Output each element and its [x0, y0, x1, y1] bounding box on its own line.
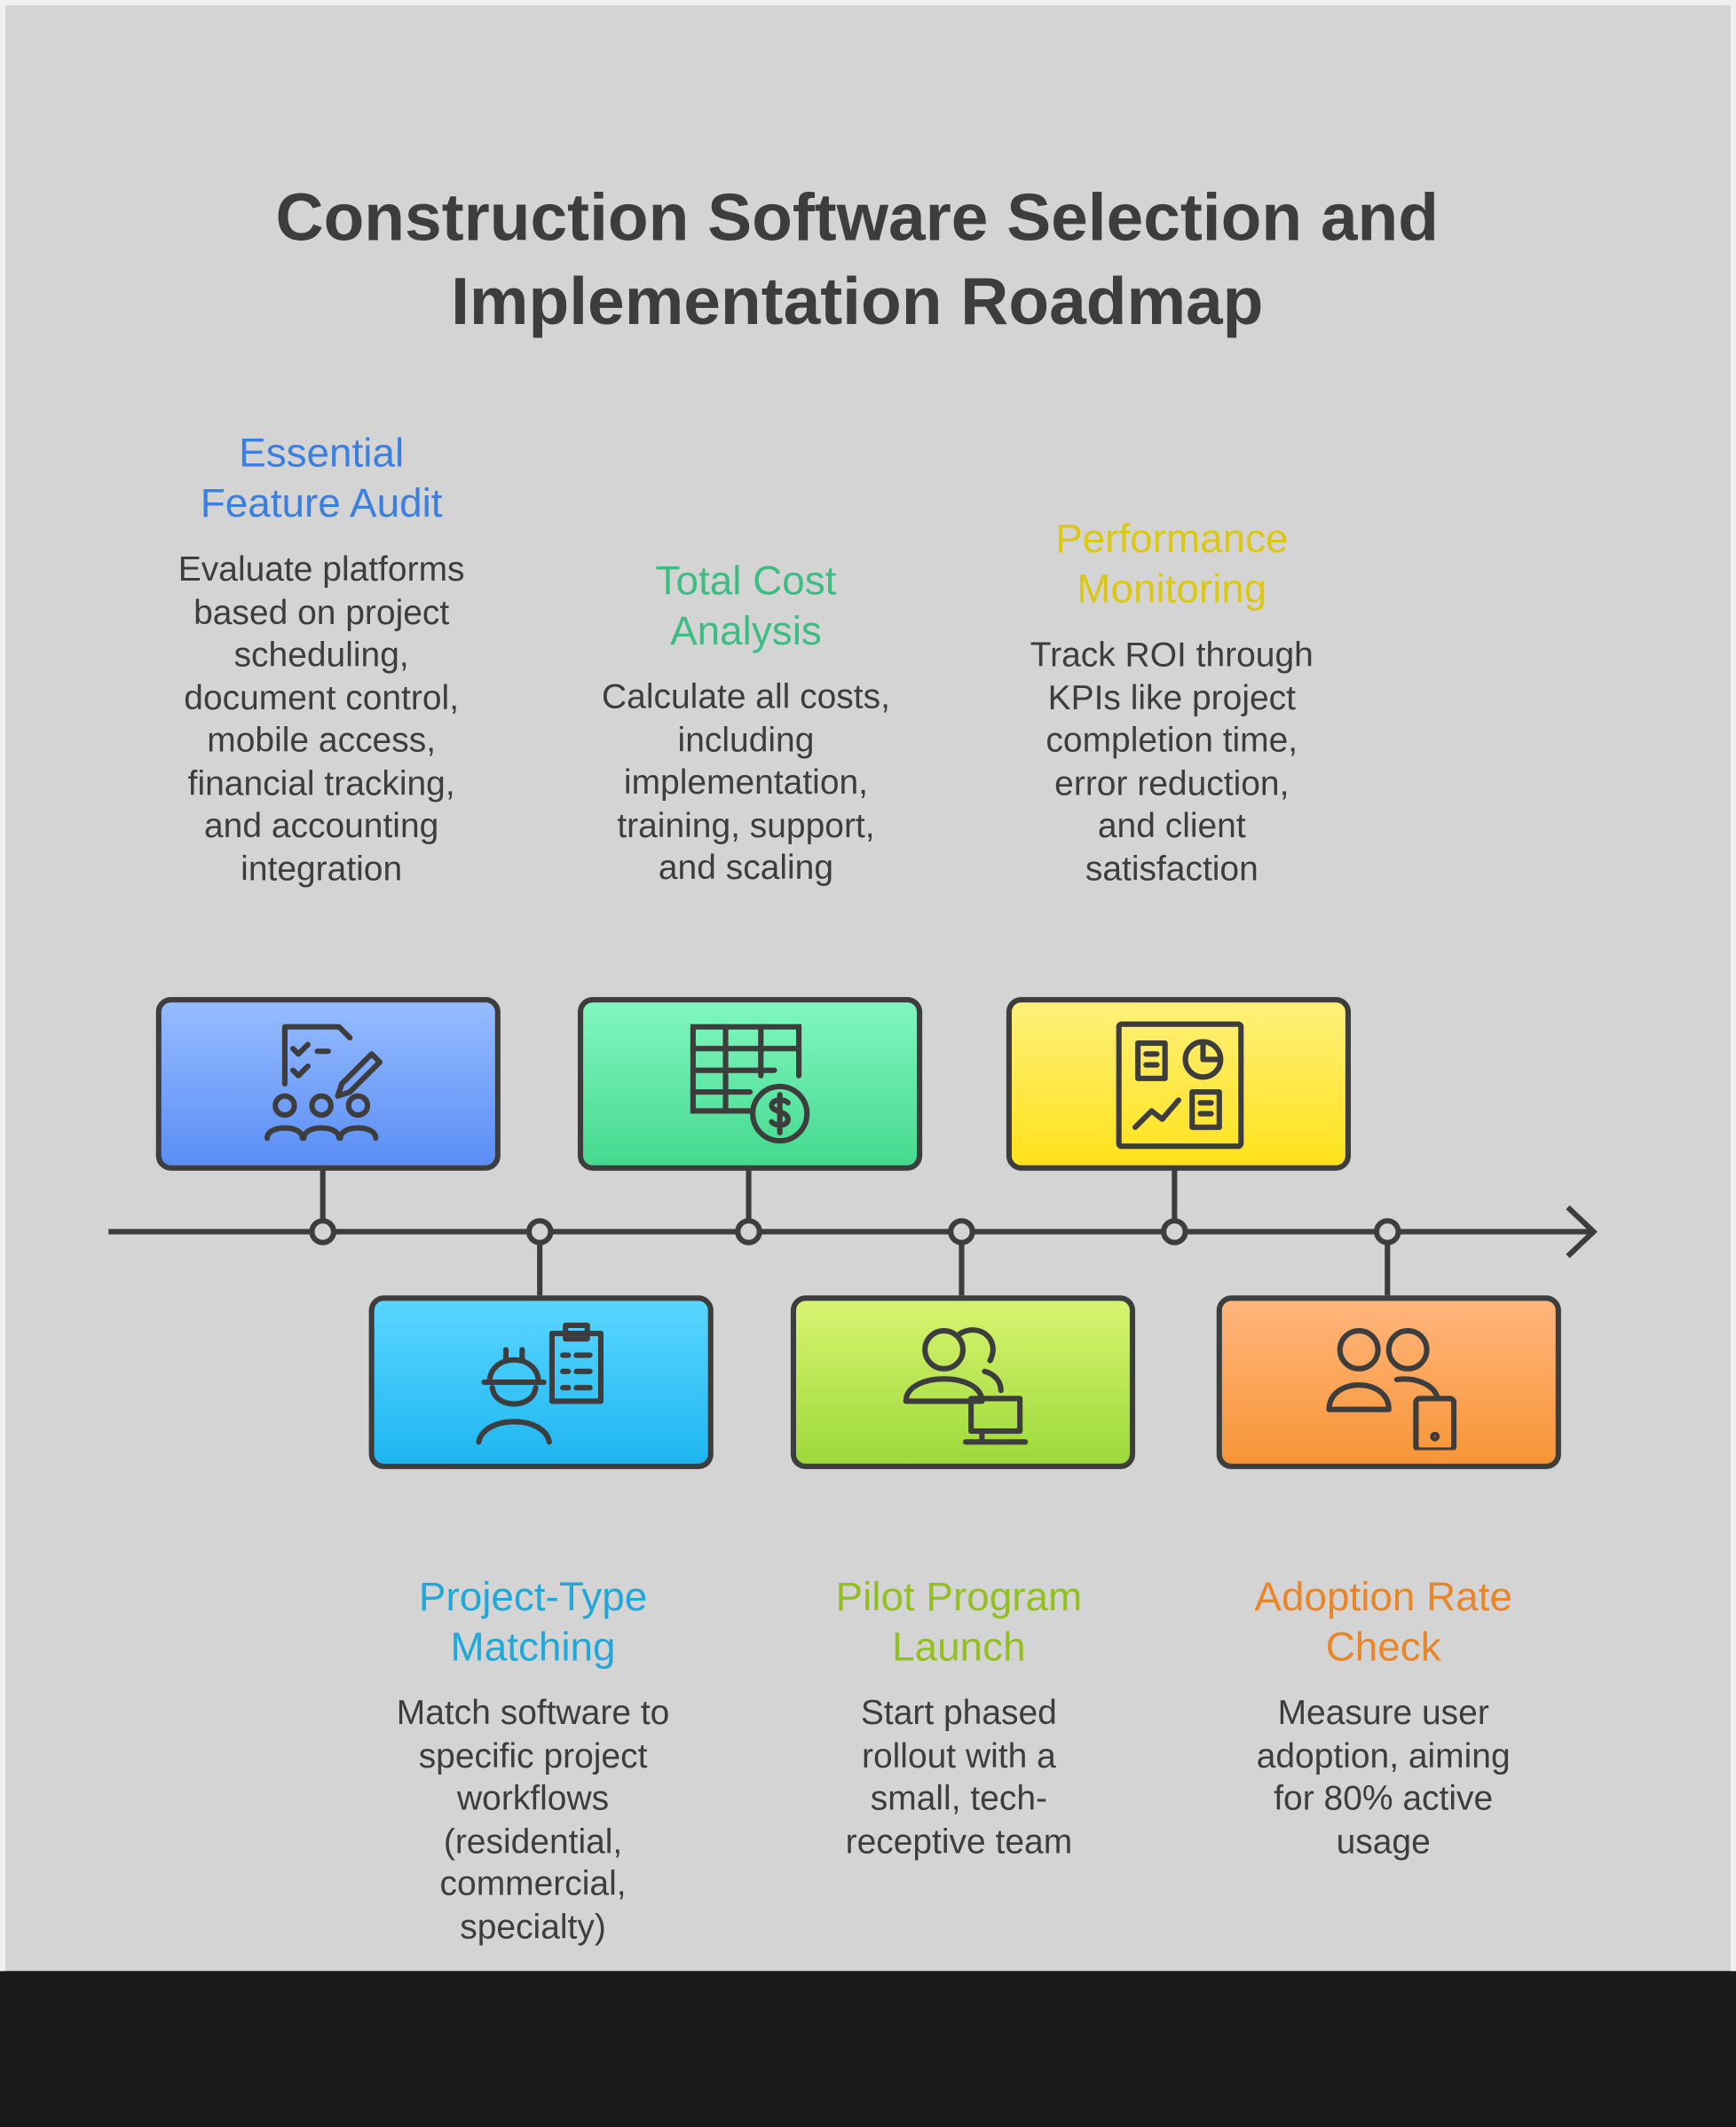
text: Project-Type Matching [397, 1575, 669, 1946]
title: Implementation Roadmap [451, 265, 1263, 339]
text: Project-Type Matching: specialty) [460, 1908, 606, 1946]
text: Adoption Rate Check: Measure user [1278, 1695, 1489, 1732]
text: Total Cost Analysis: Total Cost [656, 559, 836, 604]
text: Total Cost Analysis: and scaling [659, 850, 833, 887]
icon: worker clipboard [476, 1323, 604, 1445]
box: adoption rate [1217, 1295, 1561, 1469]
text: Essential Feature Audit: Essential [239, 431, 404, 476]
text: Project-Type Matching: specific project [419, 1737, 647, 1775]
text: Performance Monitoring: Track ROI through [1030, 637, 1314, 674]
text: Total Cost Analysis: implementation, [624, 763, 868, 802]
text: Project-Type Matching: Matching [451, 1625, 616, 1670]
text: Performance Monitoring: satisfaction [1085, 850, 1259, 888]
text: Pilot Program Launch: Launch [892, 1625, 1026, 1670]
text: Adoption Rate Check: adoption, aiming [1257, 1737, 1511, 1775]
title: Construction Software Selection and [275, 182, 1439, 255]
text: Project-Type Matching: commercial, [440, 1865, 627, 1903]
text: Performance Monitoring: and client [1098, 807, 1246, 845]
text: Pilot Program Launch [836, 1575, 1082, 1861]
text: Performance Monitoring: KPIs like project [1048, 679, 1296, 717]
text: Total Cost Analysis: including [678, 721, 814, 759]
text: Project-Type Matching: Match software to [397, 1695, 669, 1732]
text: Essential Feature Audit [178, 431, 465, 888]
text: Performance Monitoring: completion time, [1046, 722, 1298, 760]
text: Pilot Program Launch: rollout with a [862, 1737, 1056, 1775]
text: Project-Type Matching: (residential, [444, 1823, 622, 1861]
text: Essential Feature Audit: and accounting [204, 807, 438, 845]
text: Adoption Rate Check: Adoption Rate [1254, 1575, 1512, 1620]
text: Performance Monitoring: error reduction, [1054, 764, 1289, 803]
text: Adoption Rate Check [1254, 1575, 1512, 1861]
text: Pilot Program Launch: Start phased [861, 1695, 1057, 1732]
icon: users phone [1326, 1328, 1457, 1451]
text: Essential Feature Audit: Feature Audit [201, 481, 443, 526]
text: Performance Monitoring: Performance [1055, 517, 1289, 562]
text: Pilot Program Launch: small, tech- [871, 1780, 1047, 1818]
text: Essential Feature Audit: integration [241, 850, 402, 888]
box: pilot program [791, 1295, 1135, 1469]
icon: users laptop [904, 1327, 1028, 1445]
box: total cost [578, 997, 922, 1171]
text: Essential Feature Audit: Evaluate platforms [178, 550, 465, 589]
text: Project-Type Matching: Project-Type [419, 1575, 647, 1620]
text: Project-Type Matching: workflows [457, 1780, 609, 1818]
icon: checklist team [264, 1024, 383, 1142]
text: Performance Monitoring: Monitoring [1077, 567, 1266, 612]
icon: dashboard [1117, 1021, 1244, 1149]
text: Pilot Program Launch: receptive team [846, 1823, 1072, 1861]
text: Total Cost Analysis: training, support, [617, 806, 875, 844]
text: Performance Monitoring [1030, 517, 1314, 888]
text: Total Cost Analysis: Calculate all costs, [602, 678, 890, 716]
text: Essential Feature Audit: scheduling, [234, 637, 409, 674]
text: Pilot Program Launch: Pilot Program [836, 1575, 1082, 1620]
text: Essential Feature Audit: document control, [184, 679, 459, 717]
text: Essential Feature Audit: mobile access, [207, 722, 436, 760]
box: feature audit [156, 997, 501, 1171]
box: project-type matching [369, 1295, 714, 1469]
text: Essential Feature Audit: based on project [193, 594, 449, 631]
text: Adoption Rate Check: for 80% active [1274, 1780, 1493, 1818]
text: Adoption Rate Check: Check [1326, 1625, 1441, 1670]
text: Total Cost Analysis [602, 559, 890, 887]
text: Total Cost Analysis: Analysis [670, 609, 822, 654]
title [275, 182, 1439, 339]
text: Adoption Rate Check: usage [1337, 1823, 1431, 1861]
text: Essential Feature Audit: financial tracking, [188, 764, 455, 803]
icon: spreadsheet dollar [690, 1024, 809, 1143]
box: performance [1006, 997, 1351, 1171]
